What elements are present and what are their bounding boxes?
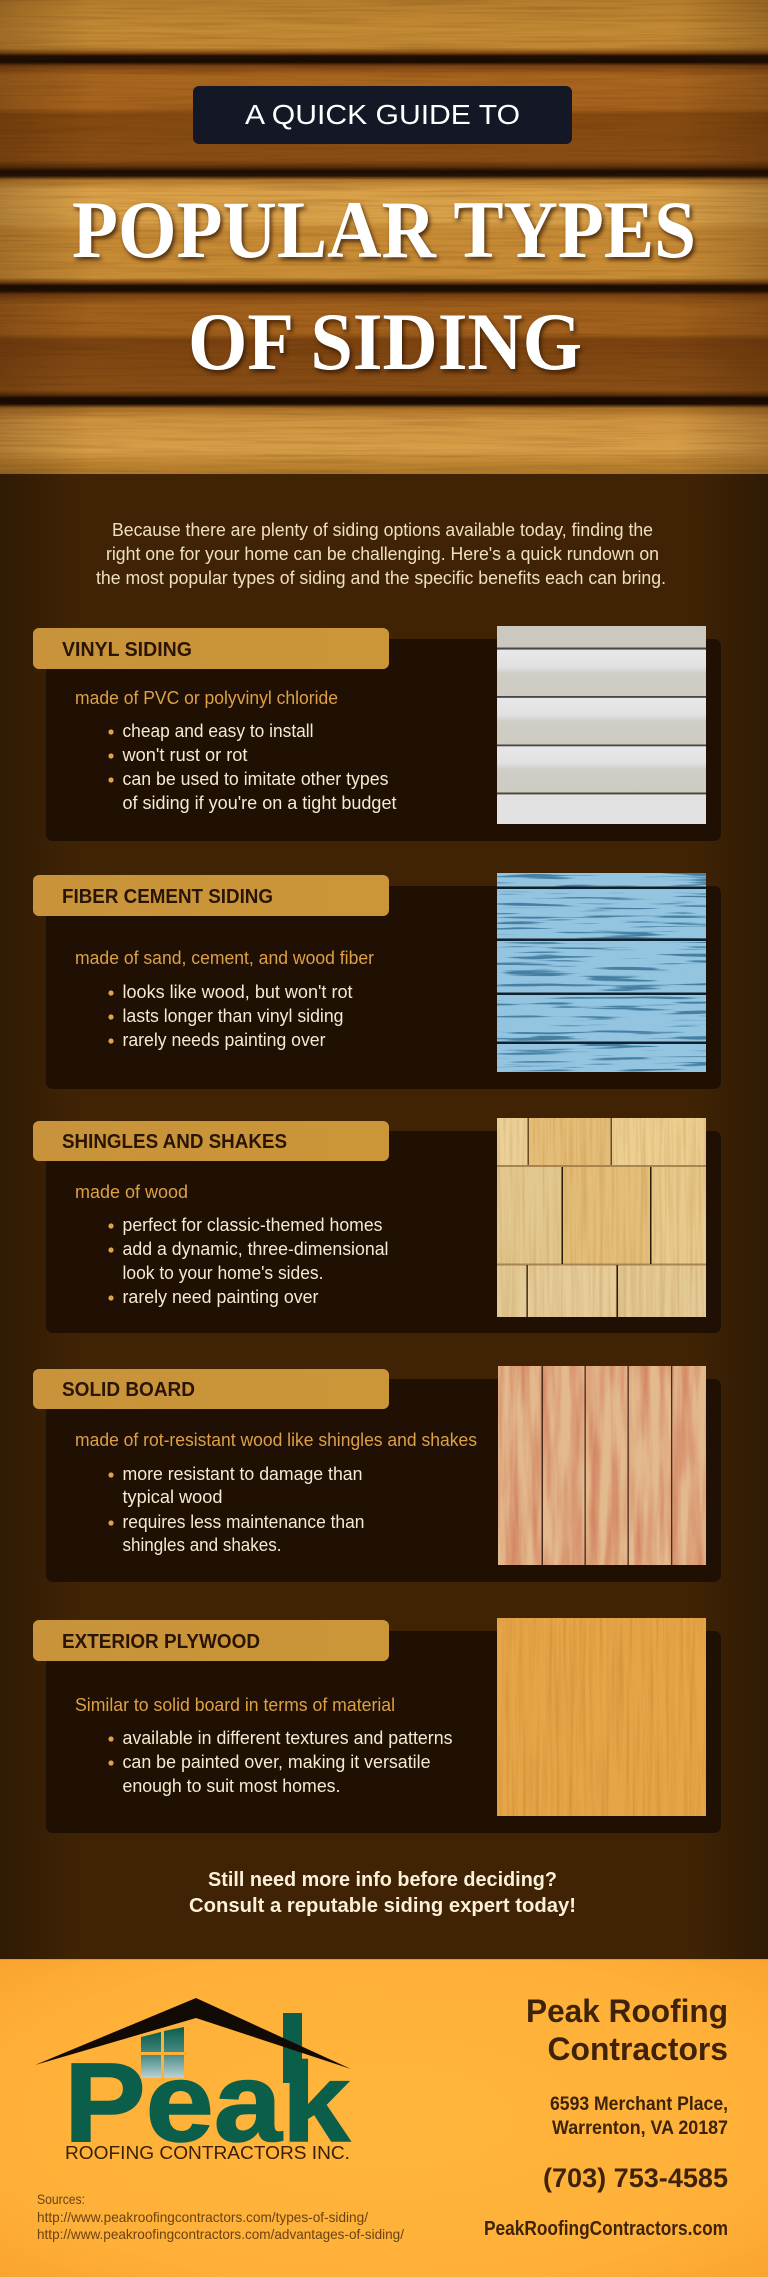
sources: http://www.peakroofingcontractors.com/types-of-siding/	[37, 2209, 368, 2225]
photo: vinyl siding	[497, 626, 706, 824]
subtitle pill: A QUICK GUIDE TO	[245, 99, 520, 130]
call to action: Consult a reputable siding expert today!	[189, 1894, 576, 1917]
bullet list	[108, 1727, 453, 1796]
contact details: 6593 Merchant Place,	[550, 2093, 728, 2115]
contact details: Contractors	[548, 2031, 728, 2067]
label: fiber cement: FIBER CEMENT SIDING	[62, 885, 273, 908]
label: solid board: SOLID BOARD	[62, 1378, 195, 1401]
intro text: the most popular types of siding and the specific benefits each can bring.	[96, 567, 666, 588]
material line: made of rot-resistant wood like shingles and shakes	[75, 1429, 477, 1450]
bullet list: enough to suit most homes.	[122, 1775, 340, 1796]
material line: made of PVC or polyvinyl chloride	[75, 687, 338, 708]
call to action: Still need more info before deciding?	[208, 1868, 557, 1891]
bullet list: won't rust or rot	[122, 744, 248, 765]
bullet list: cheap and easy to install	[122, 720, 314, 741]
panel: shingles and shakes	[33, 1118, 721, 1333]
material line: made of wood	[75, 1181, 188, 1202]
bullet list: look to your home's sides.	[122, 1262, 324, 1283]
title: OF SIDING	[188, 296, 582, 387]
label: shingles and shakes	[33, 1121, 389, 1161]
photo: wood shingles	[497, 1118, 706, 1317]
bullet list: lasts longer than vinyl siding	[122, 1005, 344, 1026]
logo: Peak Roofing Contractors	[35, 1998, 351, 2165]
title	[72, 184, 696, 387]
bullet list: can be used to imitate other types	[122, 768, 388, 789]
bullet list: more resistant to damage than	[122, 1463, 362, 1484]
logo tagline: ROOFING CONTRACTORS INC.	[65, 2143, 350, 2163]
material line: Similar to solid board in terms of material	[75, 1694, 395, 1715]
bullet list	[108, 720, 397, 813]
intro text	[96, 519, 666, 588]
intro text: right one for your home can be challenging. Here's a quick rundown on	[106, 543, 659, 564]
header: wood siding background	[0, 0, 768, 474]
footer panel	[0, 1959, 768, 2277]
sources	[37, 2191, 404, 2242]
call to action	[189, 1868, 576, 1917]
contact details: Peak Roofing	[526, 1993, 728, 2029]
label: vinyl siding: VINYL SIDING	[62, 638, 192, 661]
label: shingles and shakes: SHINGLES AND SHAKES	[62, 1130, 287, 1153]
panel: solid board	[33, 1366, 721, 1582]
contact details: Warrenton, VA 20187	[552, 2117, 728, 2139]
photo: plywood	[497, 1618, 706, 1816]
label: fiber cement	[33, 875, 389, 916]
label: solid board	[33, 1369, 389, 1409]
bullet list: shingles and shakes.	[122, 1534, 282, 1555]
bullet list: perfect for classic-themed homes	[122, 1214, 382, 1235]
material line: made of sand, cement, and wood fiber	[75, 947, 374, 968]
bullet list	[108, 1463, 365, 1555]
bullet list: available in different textures and patterns	[122, 1727, 452, 1748]
photo: fiber cement siding	[497, 873, 706, 1072]
sources: Sources:	[37, 2191, 85, 2207]
bullet list	[108, 981, 353, 1050]
bullet list: rarely needs painting over	[122, 1029, 326, 1050]
photo: solid board planks	[498, 1366, 706, 1565]
contact details: PeakRoofingContractors.com	[484, 2217, 728, 2240]
bullet list: requires less maintenance than	[122, 1511, 364, 1532]
panel: exterior plywood	[33, 1618, 721, 1833]
panel: vinyl siding	[33, 626, 721, 841]
main brown background	[0, 474, 768, 1959]
panel: fiber cement siding	[33, 873, 721, 1089]
label: vinyl siding	[33, 628, 389, 669]
bullet list: looks like wood, but won't rot	[122, 981, 352, 1002]
bullet list: add a dynamic, three-dimensional	[122, 1238, 388, 1259]
sources: http://www.peakroofingcontractors.com/advantages-of-siding/	[37, 2226, 404, 2242]
title: POPULAR TYPES	[72, 184, 696, 275]
bullet list: typical wood	[122, 1486, 222, 1507]
bullet list: of siding if you're on a tight budget	[122, 792, 396, 813]
logo chimney stem	[283, 2013, 302, 2083]
intro text: Because there are plenty of siding options available today, finding the	[112, 519, 653, 540]
bullet list	[108, 1214, 389, 1307]
subtitle pill	[193, 86, 572, 144]
label: exterior plywood	[33, 1620, 389, 1661]
contact details	[484, 1993, 728, 2240]
bullet list: rarely need painting over	[122, 1286, 318, 1307]
contact details: (703) 753-4585	[543, 2163, 728, 2193]
logo window	[141, 2027, 185, 2078]
label: exterior plywood: EXTERIOR PLYWOOD	[62, 1630, 260, 1653]
bullet list: can be painted over, making it versatile	[122, 1751, 430, 1772]
logo wordmark: Peak	[64, 2040, 351, 2165]
logo roof	[35, 1998, 351, 2069]
